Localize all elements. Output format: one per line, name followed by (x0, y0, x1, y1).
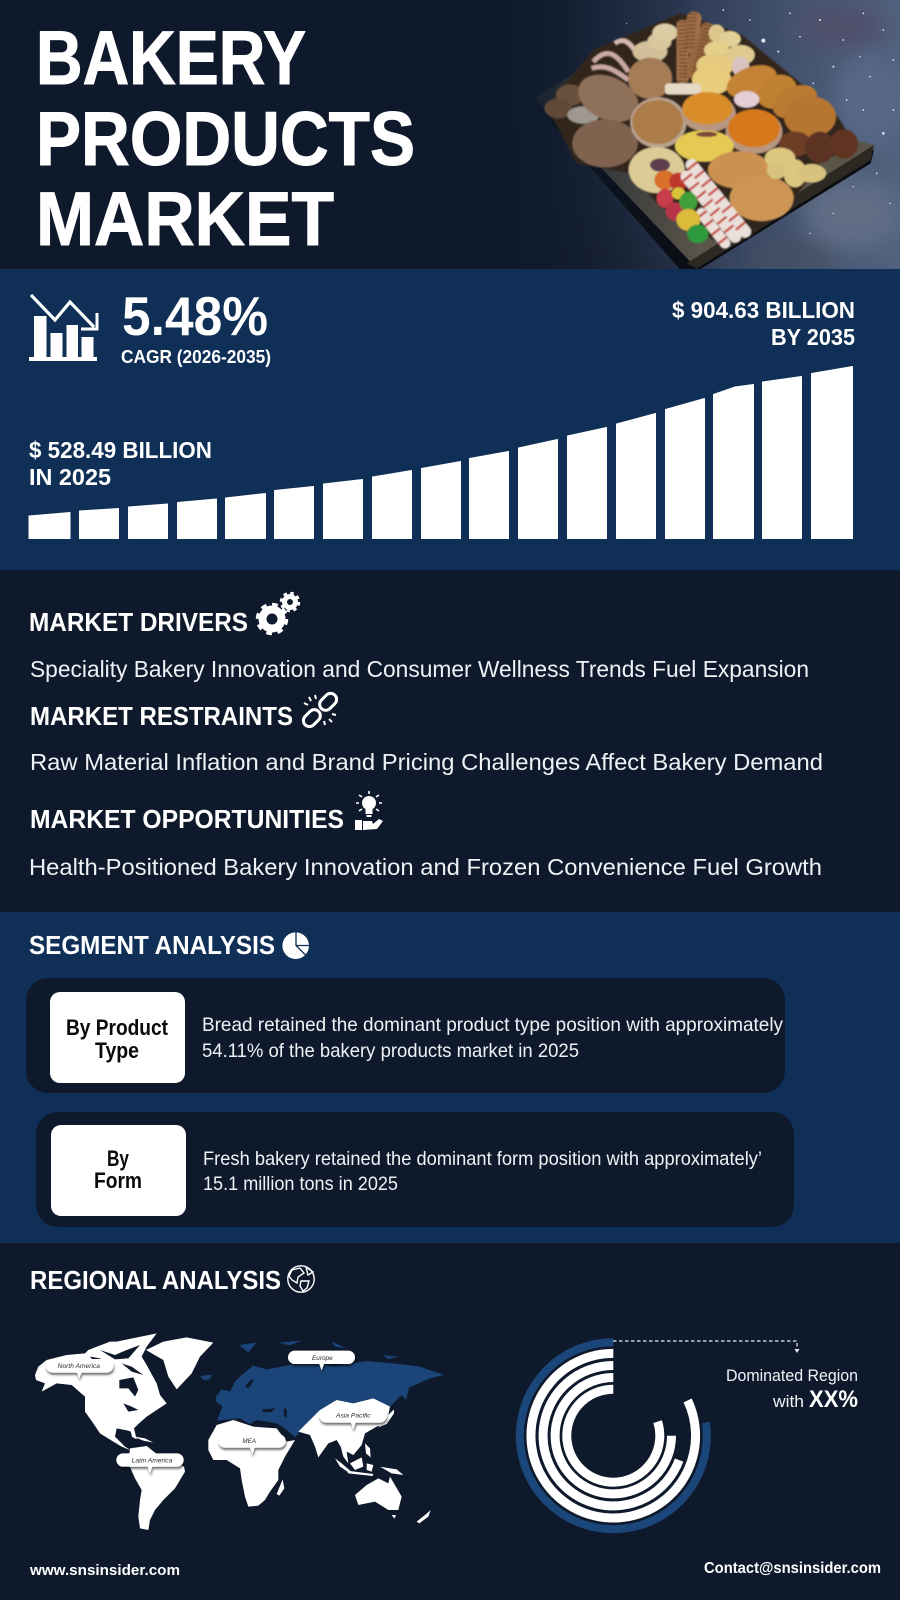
CAGR value: 5.48% (122, 285, 268, 347)
card: by form: 15.1 million tons in 2025 (203, 1173, 398, 1195)
icon: broken chain (301, 691, 339, 729)
icon: hand with bulb (355, 791, 383, 830)
bar chart: market growth (29, 366, 852, 538)
bubble: MEA: MEA (242, 1438, 257, 1445)
radial bar chart (520, 1342, 707, 1529)
card: by product type: 54.11% of the bakery products market in 2025 (202, 1040, 579, 1062)
text: driver: Speciality Bakery Innovation and Consumer Wellness Trends Fuel Expansion (30, 656, 809, 682)
panel: regional analysis (0, 1243, 900, 1600)
card: by product type (26, 978, 785, 1093)
footer: website: www.snsinsider.com (29, 1562, 180, 1579)
panel: drivers restraints opportunities (0, 570, 900, 912)
bubble: Latin America (116, 1453, 184, 1474)
panel: segment analysis (0, 912, 900, 1243)
callout: dominated region: XX% (809, 1386, 858, 1413)
icon: chart with arrow (29, 295, 97, 361)
icon: gears (258, 594, 298, 633)
value 2025: $ 528.49 BILLION (29, 437, 212, 463)
value 2025: IN 2025 (29, 464, 111, 490)
map: dark seas (245, 1379, 287, 1418)
bubble: Europe: Europe (312, 1355, 333, 1362)
CAGR value: CAGR (2026-2035) (121, 347, 271, 367)
world map (35, 1333, 444, 1530)
card: by product type: Type (95, 1038, 139, 1063)
icon: globe (288, 1266, 314, 1292)
value 2035: BY 2035 (771, 324, 855, 350)
bubble: North America: North America (58, 1363, 100, 1370)
heading: market restraints: MARKET RESTRAINTS (30, 701, 293, 731)
card: by product type: Bread retained the dominant product type position with approximately (202, 1014, 783, 1036)
icon: pie chart (282, 932, 310, 959)
title: BAKERY (36, 16, 306, 101)
bubble: Europe (288, 1351, 355, 1371)
card: by form: Form (94, 1168, 142, 1193)
bubble: Asia Pacific: Asia Pacific (335, 1413, 371, 1420)
photo: tray of bakery products (500, 0, 900, 270)
value 2025 (29, 437, 212, 490)
map: dark bays and lakes (90, 1345, 143, 1442)
card: by form: Fresh bakery retained the dominant form position with approximately’ (203, 1148, 762, 1170)
panel: header (0, 0, 900, 270)
card: by product type: By Product (66, 1015, 169, 1040)
callout: dominated region: with (772, 1392, 804, 1411)
card: by form: By (107, 1146, 130, 1171)
heading: segment analysis: SEGMENT ANALYSIS (29, 930, 275, 960)
title (36, 16, 415, 262)
text: restraint: Raw Material Inflation and Brand Pricing Challenges Affect Bakery Demand (30, 749, 823, 775)
title: MARKET (36, 177, 334, 262)
footer: contact: Contact@snsinsider.com (704, 1560, 881, 1577)
card: by form (36, 1112, 794, 1227)
bubble: MEA (218, 1434, 286, 1455)
callout: dominated region: Dominated Region (726, 1366, 858, 1385)
bubble: Latin America: Latin America (132, 1458, 173, 1465)
map: white continents (35, 1333, 431, 1530)
bubble: North America (46, 1359, 113, 1379)
value 2035 (672, 297, 855, 350)
heading: market drivers: MARKET DRIVERS (29, 607, 248, 637)
map: Eurasia highlighted (200, 1341, 444, 1437)
callout: dominated region (726, 1366, 858, 1413)
heading: regional analysis: REGIONAL ANALYSIS (30, 1265, 281, 1295)
title: PRODUCTS (36, 97, 415, 182)
heading: market opportunities: MARKET OPPORTUNITIES (30, 804, 344, 834)
value 2035: $ 904.63 BILLION (672, 297, 855, 323)
bubble: Asia Pacific (319, 1409, 387, 1430)
dashed arrow (613, 1341, 800, 1353)
panel: market size and CAGR (0, 269, 900, 570)
text: opportunity: Health-Positioned Bakery Innovation and Frozen Convenience Fuel Growth (29, 854, 822, 880)
